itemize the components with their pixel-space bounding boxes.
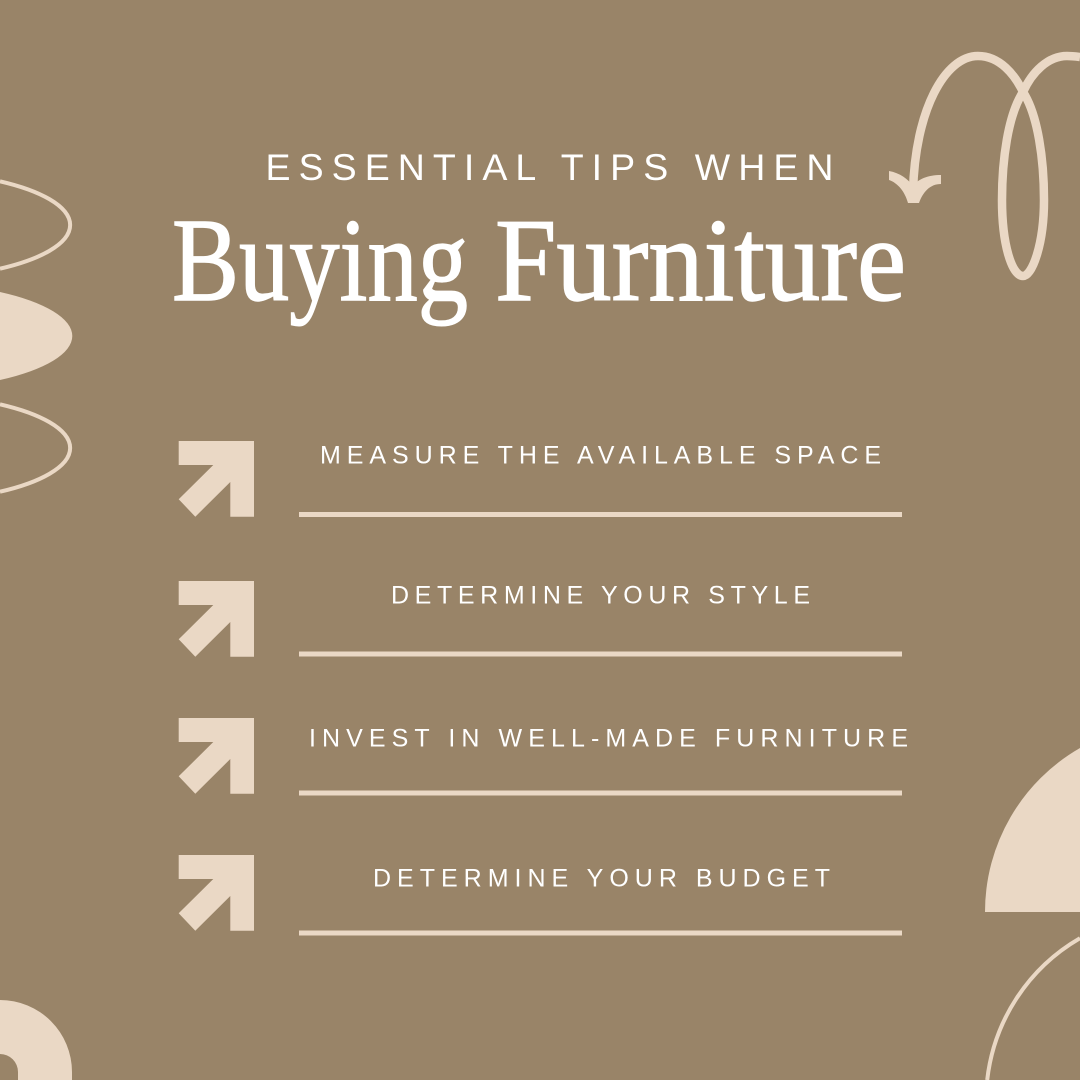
decorative shape: bottom-right arc: [987, 938, 1080, 1080]
tip 4: determine your budget: [179, 855, 902, 936]
tip 2: determine your style: DETERMINE YOUR STYLE: [391, 582, 810, 610]
decorative shape: bottom-left ring: [0, 1000, 72, 1080]
tip 1: measure the available space: [179, 441, 902, 517]
title: buying furniture: Furniture: [495, 194, 906, 326]
icon: looping arrow: [889, 56, 1080, 276]
decorative shapes: left ellipses: [0, 181, 72, 492]
title: buying furniture: Buying: [172, 194, 468, 326]
tip 4: determine your budget: DETERMINE YOUR BUDGET: [373, 864, 830, 892]
title: buying furniture: [172, 194, 906, 326]
tip 3: invest in well-made furniture: [179, 718, 908, 796]
decorative shape: right semicircle: [985, 748, 1080, 912]
tip 1: measure the available space: MEASURE THE AVAILABLE SPACE: [320, 442, 881, 470]
heading: essential tips when: ESSENTIAL TIPS WHEN: [266, 146, 834, 188]
tip 2: determine your style: [179, 581, 902, 657]
tip 3: invest in well-made furniture: INVEST IN WELL-MADE FURNITURE: [309, 724, 908, 752]
